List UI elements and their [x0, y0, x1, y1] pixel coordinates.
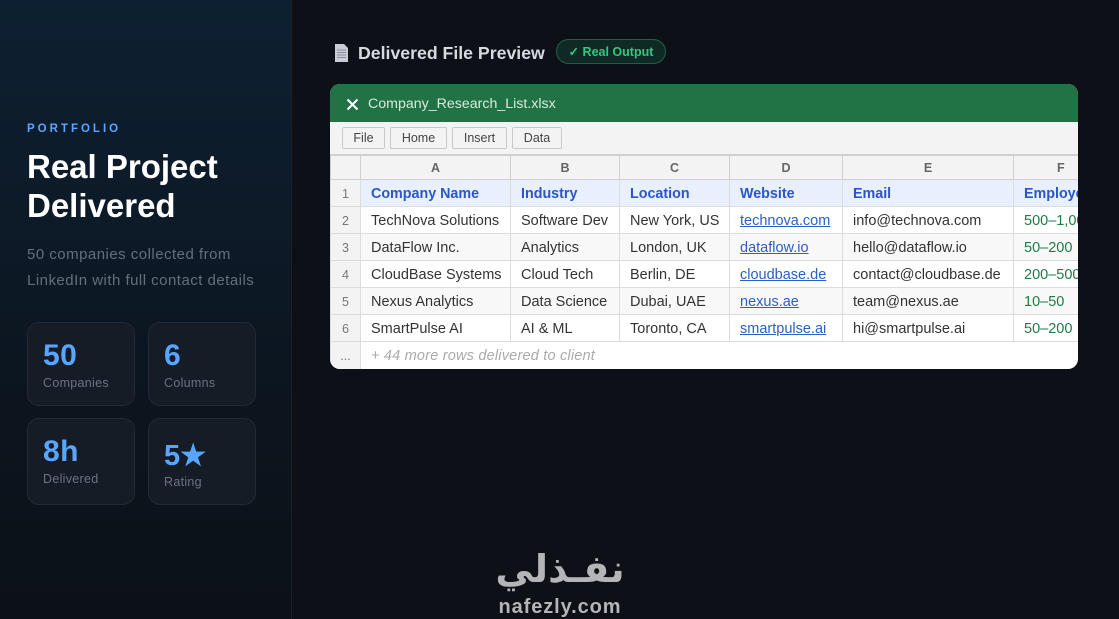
spreadsheet table: SmartPulse AI [371, 321, 463, 337]
toolbar [330, 122, 1078, 155]
spreadsheet table: Dubai, UAE [630, 294, 706, 310]
description [27, 246, 254, 289]
watermark arabic wordmark: نفـذلي [495, 547, 625, 591]
spreadsheet table: 10–50 [1024, 294, 1064, 310]
spreadsheet table: team@nexus.ae [853, 294, 959, 310]
spreadsheet table: London, UK [630, 240, 707, 256]
spreadsheet table: 5 [342, 295, 349, 309]
button: data [512, 127, 562, 149]
spreadsheet table: 1 [342, 187, 349, 201]
spreadsheet table: cloudbase.de [740, 267, 826, 283]
badge: real output: ✓ Real Output [569, 45, 653, 59]
section heading: Delivered File Preview [358, 43, 545, 63]
panel: spreadsheet window [330, 84, 1078, 369]
stat: companies: 50 [43, 339, 77, 372]
stat: companies: Companies [43, 376, 109, 390]
spreadsheet table: 2 [342, 214, 349, 228]
spreadsheet table: Berlin, DE [630, 267, 695, 283]
button: insert [452, 127, 507, 149]
spreadsheet table: hi@smartpulse.ai [853, 321, 965, 337]
spreadsheet table: 50–200 [1024, 240, 1072, 256]
heading: Real Project [27, 148, 218, 185]
button: insert: Insert [464, 131, 495, 145]
stat: rating [148, 418, 256, 505]
spreadsheet table: Website [740, 186, 795, 202]
stat: rating: 5★ [164, 440, 206, 472]
spreadsheet table: dataflow.io [740, 240, 809, 256]
spreadsheet table: B [560, 160, 570, 174]
button: file: File [353, 131, 374, 145]
button: home [390, 127, 447, 149]
spreadsheet table: Nexus Analytics [371, 294, 473, 310]
stat: companies [27, 322, 135, 406]
spreadsheet table: Analytics [521, 240, 579, 256]
stat: delivered: 8h [43, 435, 79, 468]
spreadsheet table: Toronto, CA [630, 321, 707, 337]
spreadsheet table: Location [630, 186, 690, 202]
badge: real output [556, 39, 666, 64]
spreadsheet table: TechNova Solutions [371, 213, 499, 229]
spreadsheet table: D [781, 160, 791, 174]
spreadsheet table: ... [340, 349, 351, 363]
spreadsheet table: Data Science [521, 294, 607, 310]
stat: rating: Rating [164, 475, 202, 489]
spreadsheet table: 50–200 [1024, 321, 1072, 337]
spreadsheet table: C [670, 160, 679, 174]
spreadsheet table: technova.com [740, 213, 830, 229]
title bar [330, 84, 1078, 122]
spreadsheet table [330, 155, 1078, 369]
spreadsheet table: F [1057, 160, 1065, 174]
spreadsheet table: Software Dev [521, 213, 608, 229]
spreadsheet table: A [431, 160, 440, 174]
watermark logo [495, 547, 625, 618]
spreadsheet table: 6 [342, 322, 349, 336]
watermark url: nafezly.com [499, 596, 621, 618]
spreadsheet table: smartpulse.ai [740, 321, 826, 337]
icon: close [346, 98, 358, 110]
button: data: Data [524, 131, 550, 145]
spreadsheet table: Email [853, 186, 891, 202]
spreadsheet table: CloudBase Systems [371, 267, 502, 283]
stat: columns [148, 322, 256, 406]
file name: Company_Research_List.xlsx [368, 96, 556, 112]
spreadsheet table: New York, US [630, 213, 719, 229]
spreadsheet table: Industry [521, 186, 577, 202]
eyebrow label: PORTFOLIO [27, 123, 121, 135]
stat: columns: 6 [164, 339, 181, 372]
heading: Delivered [27, 187, 176, 224]
panel: sidebar [0, 0, 292, 619]
description: 50 companies collected from [27, 246, 231, 263]
spreadsheet table: E [924, 160, 932, 174]
spreadsheet table: hello@dataflow.io [853, 240, 967, 256]
stat: delivered [27, 418, 135, 505]
spreadsheet table: contact@cloudbase.de [853, 267, 1001, 283]
spreadsheet table: Company Name [371, 186, 479, 202]
spreadsheet table: + 44 more rows delivered to client [371, 348, 595, 364]
icon: document [335, 44, 348, 62]
stat: columns: Columns [164, 376, 215, 390]
spreadsheet table: 4 [342, 268, 349, 282]
spreadsheet table: Cloud Tech [521, 267, 593, 283]
stat: delivered: Delivered [43, 472, 99, 486]
spreadsheet table: info@technova.com [853, 213, 981, 229]
heading [27, 148, 218, 224]
spreadsheet table: 3 [342, 241, 349, 255]
button: file [342, 127, 385, 149]
description: LinkedIn with full contact details [27, 272, 254, 289]
spreadsheet table: DataFlow Inc. [371, 240, 460, 256]
spreadsheet table: nexus.ae [740, 294, 799, 310]
spreadsheet table: AI & ML [521, 321, 573, 337]
button: home: Home [402, 131, 435, 145]
